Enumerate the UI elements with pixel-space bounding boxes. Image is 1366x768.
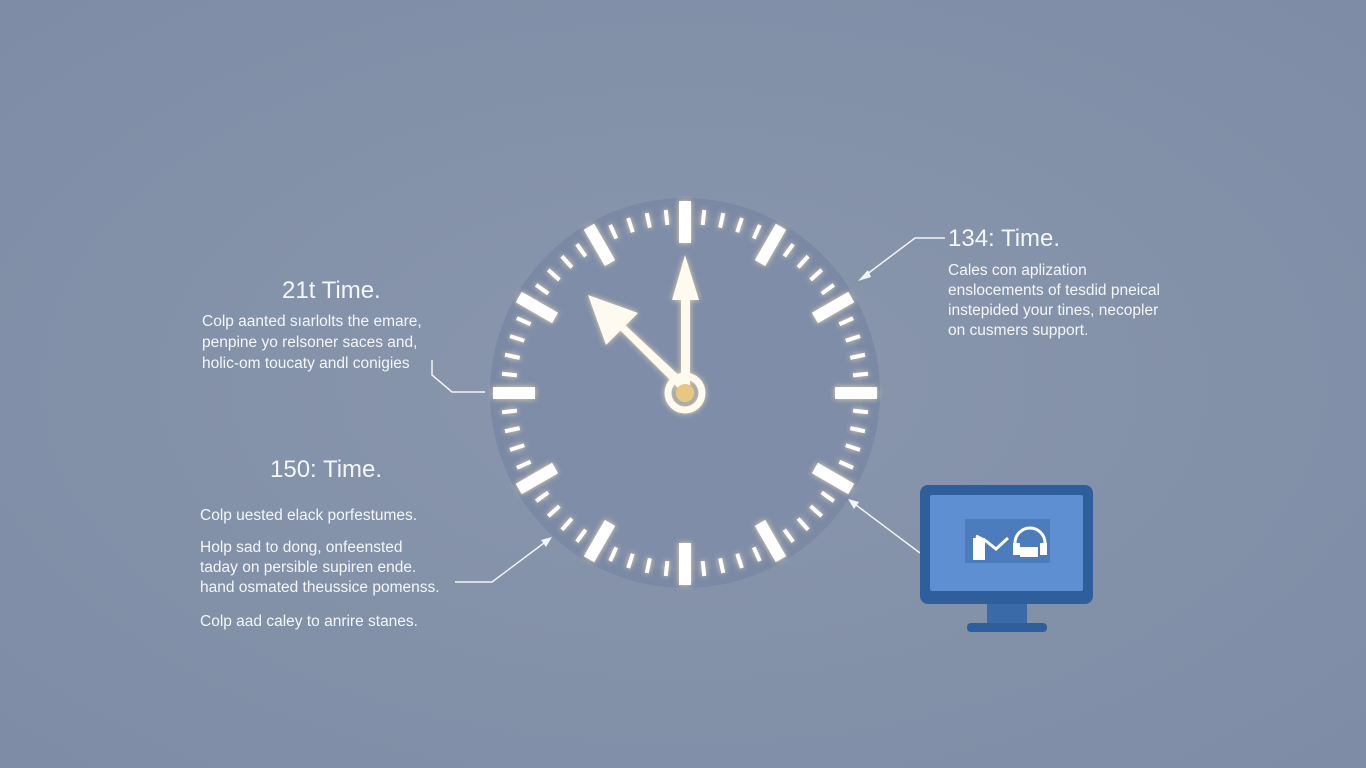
text 150: Colp uested elack porfestumes. xyxy=(200,507,417,524)
text 150 second: hand osmated theussice pomenss. xyxy=(200,579,440,596)
icon: monitor xyxy=(920,485,1093,632)
clock face xyxy=(490,198,880,588)
text 150 second xyxy=(200,539,440,596)
heading 150: 150: Time. xyxy=(270,456,382,483)
text 134: Cales con aplization xyxy=(948,262,1087,279)
text 134: enslocements of tesdid pneical xyxy=(948,282,1160,299)
block: 150 Time xyxy=(200,456,417,524)
text 21t: holic-om toucaty andl conigies xyxy=(202,355,410,372)
text 134 xyxy=(948,262,1160,339)
text 21t xyxy=(202,313,422,372)
text 134: on cusmers support. xyxy=(948,322,1088,339)
text 150 second: taday on persible supiren ende. xyxy=(200,559,416,576)
text 150 second: Holp sad to dong, onfeensted xyxy=(200,539,403,556)
clock ticks xyxy=(493,201,877,585)
connector lines xyxy=(432,238,945,582)
text 134: instepided your tines, necopler xyxy=(948,302,1158,319)
heading 21t: 21t Time. xyxy=(282,277,381,304)
block: 134 Time xyxy=(948,225,1160,339)
text 21t: penpine yo relsoner saces and, xyxy=(202,334,417,351)
text 21t: Colp aanted sıarlolts the emare, xyxy=(202,313,422,330)
clock hands xyxy=(588,255,702,410)
block: 21t Time xyxy=(202,277,422,372)
heading 134: 134: Time. xyxy=(948,225,1060,252)
text 150 third: Colp aad caley to anrire stanes. xyxy=(200,613,418,630)
